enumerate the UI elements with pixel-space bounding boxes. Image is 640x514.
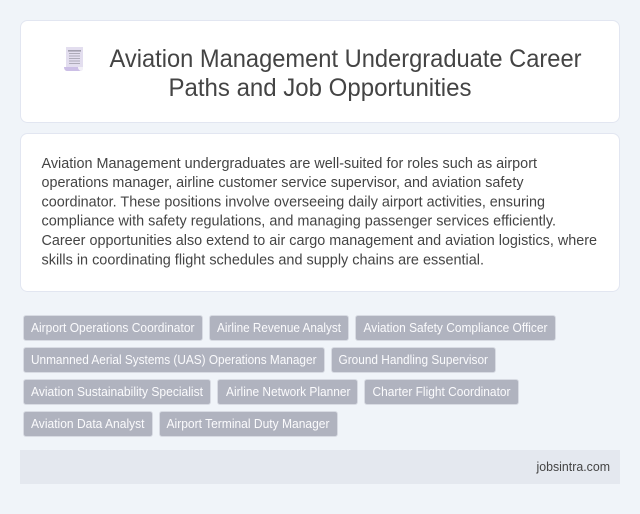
tag: Aviation Sustainability Specialist bbox=[24, 380, 210, 404]
tag: UAS Operations Manager bbox=[24, 348, 324, 372]
tag: Charter Flight Coordinator bbox=[364, 380, 518, 404]
footer source text: jobsintra.com bbox=[536, 460, 610, 474]
tag: Aviation Safety Compliance Officer: Aviation Safety Compliance Officer bbox=[364, 321, 548, 335]
tag: UAS Operations Manager: Unmanned Aerial Systems (UAS) Operations Manager bbox=[31, 353, 316, 367]
tag: Airline Network Planner: Airline Network Planner bbox=[226, 385, 350, 399]
tag: Airline Revenue Analyst: Airline Revenue Analyst bbox=[217, 321, 341, 335]
tag: Ground Handling Supervisor: Ground Handling Supervisor bbox=[338, 353, 488, 367]
tag: Aviation Sustainability Specialist: Aviation Sustainability Specialist bbox=[31, 385, 203, 399]
panel: title card bbox=[20, 20, 620, 122]
summary paragraph: Aviation Management undergraduates are well-suited for roles such as airport bbox=[42, 156, 537, 172]
tag: Charter Flight Coordinator: Charter Flight Coordinator bbox=[372, 385, 510, 399]
tag: Airport Terminal Duty Manager: Airport Terminal Duty Manager bbox=[166, 417, 330, 431]
summary paragraph: operations manager, airline customer service supervisor, and aviation safety bbox=[42, 175, 524, 191]
tag: Aviation Data Analyst bbox=[24, 412, 152, 436]
tag: Airline Network Planner bbox=[218, 380, 358, 404]
tag: Ground Handling Supervisor bbox=[332, 348, 496, 372]
tag: Aviation Data Analyst: Aviation Data Analyst bbox=[31, 417, 145, 431]
title bbox=[110, 45, 582, 102]
tag: Airport Operations Coordinator: Airport Operations Coordinator bbox=[31, 321, 194, 335]
tag: Airport Operations Coordinator bbox=[24, 316, 202, 340]
summary paragraph: skills in coordinating flight schedules and supply chains are essential. bbox=[42, 252, 484, 268]
tag: Aviation Safety Compliance Officer bbox=[356, 316, 556, 340]
tag: Airline Revenue Analyst bbox=[210, 316, 348, 340]
icon: document scroll bbox=[64, 47, 83, 71]
footer bar bbox=[20, 450, 620, 484]
title: Paths and Job Opportunities bbox=[168, 74, 472, 102]
summary paragraph: compliance with safety regulations, and managing passenger services efficiently. bbox=[42, 214, 556, 230]
panel: summary text card bbox=[20, 134, 620, 292]
summary paragraph: Career opportunities also extend to air cargo management and aviation logistics, where bbox=[42, 233, 597, 249]
job tags bbox=[24, 316, 556, 436]
summary paragraph: coordinator. These positions involve overseeing daily airport activities, ensuring bbox=[42, 194, 545, 210]
title: Aviation Management Undergraduate Career bbox=[110, 45, 582, 73]
summary paragraph bbox=[42, 156, 597, 268]
tag: Airport Terminal Duty Manager bbox=[160, 412, 338, 436]
